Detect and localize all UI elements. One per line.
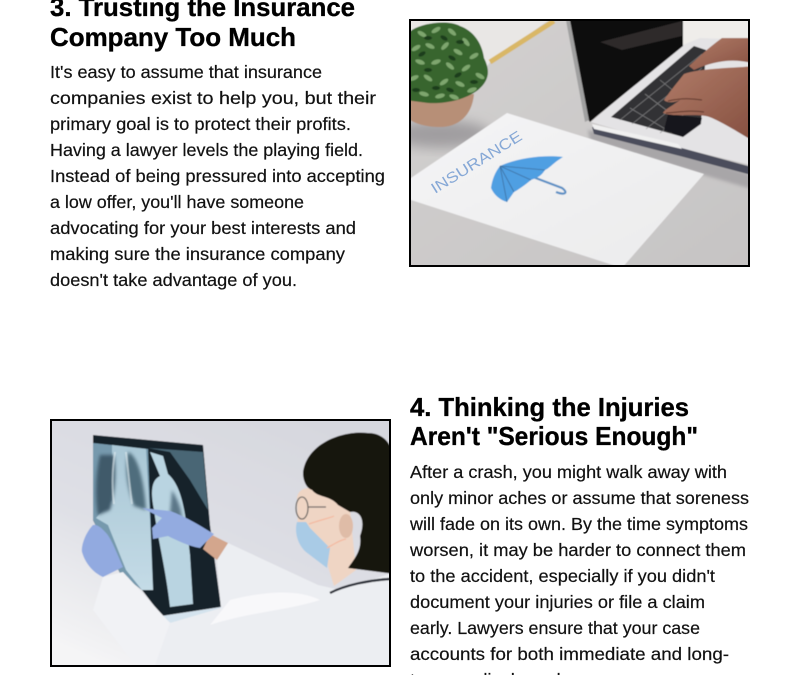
paper xyxy=(405,113,704,268)
photo: insurance paper on desk beside laptop xyxy=(390,15,755,271)
text block: section 4 body: will fade on its own. By the time symptoms xyxy=(409,514,748,534)
text block: section 3 body: doesn't take advantage of you. xyxy=(50,270,297,290)
x-ray film xyxy=(93,435,222,624)
heading: section 4 xyxy=(410,392,698,451)
heading: section 4: Aren't "Serious Enough" xyxy=(410,421,698,451)
laptop xyxy=(565,15,755,176)
umbrella xyxy=(491,156,565,202)
text block: section 4 body: to the accident, especially if you didn't xyxy=(410,566,715,586)
text block: section 4 body: worsen, it may be harder to connect them xyxy=(409,540,746,560)
text block: section 3 body: It's easy to assume that insurance xyxy=(50,62,322,82)
coat: torso and raised arms xyxy=(93,543,395,671)
text block: section 4 body: After a crash, you might walk away with xyxy=(410,462,727,482)
mask xyxy=(296,522,330,568)
photo: doctor examining a spinal x-ray xyxy=(45,415,395,671)
text block: section 3 body xyxy=(50,62,385,290)
laptop shadow xyxy=(588,130,755,190)
text block: section 4 body: document your injuries or file a claim xyxy=(410,592,705,612)
text block: section 3 body: a low offer, you'll have someone xyxy=(50,192,304,212)
plant xyxy=(411,22,488,154)
text block: section 4 body xyxy=(409,462,749,675)
neck and face xyxy=(297,488,356,586)
stethoscope xyxy=(330,579,390,593)
ear-loop xyxy=(309,516,346,548)
text block: section 3 body: primary goal is to protect their profits. xyxy=(50,114,351,134)
heading: section 3: Company Too Much xyxy=(50,22,296,52)
text block: section 3 body: advocating for your best interests and xyxy=(50,218,356,238)
heading: section 4: 4. Thinking the Injuries xyxy=(410,392,689,422)
heading: section 3 xyxy=(50,0,355,52)
left glove xyxy=(82,525,123,577)
text block: section 4 body: early. Lawyers ensure that your case xyxy=(410,618,700,638)
right wrist xyxy=(203,534,228,560)
glasses xyxy=(296,497,326,519)
text block: section 3 body: making sure the insurance company xyxy=(50,244,345,264)
text block: section 3 body: companies exist to help you, but their xyxy=(50,88,376,108)
label on the paper: INSURANCE xyxy=(428,128,525,197)
text block: section 3 body: Having a lawyer levels the playing field. xyxy=(50,140,363,160)
text block: section 4 body: accounts for both immediate and long- xyxy=(410,644,729,664)
text block: section 4 body: only minor aches or assume that soreness xyxy=(410,488,749,508)
pointing glove xyxy=(142,508,214,548)
hair xyxy=(303,433,395,574)
text block: section 3 body: Instead of being pressured into accepting xyxy=(50,166,385,186)
